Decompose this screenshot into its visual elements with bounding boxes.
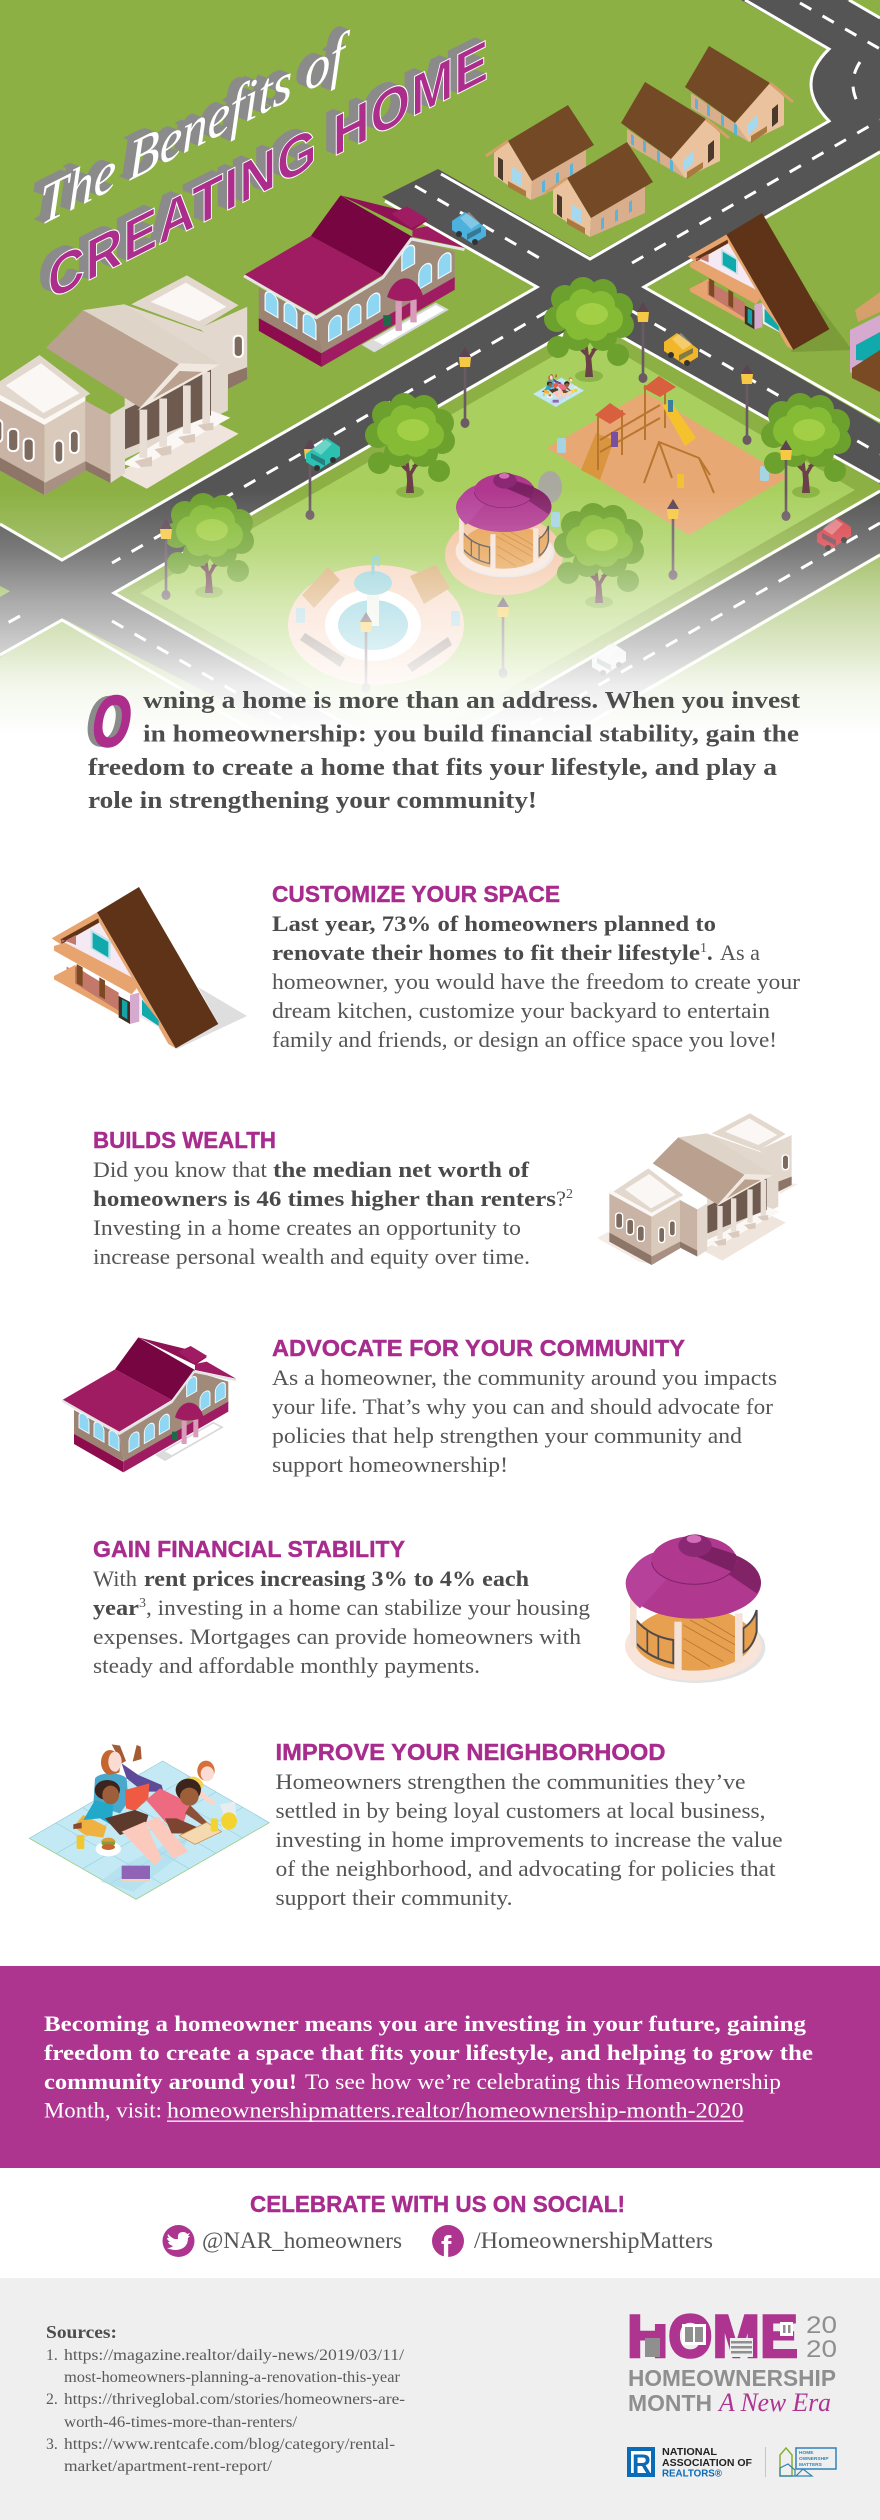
fountain plaza xyxy=(288,557,464,685)
heading: social: CELEBRATE WITH US ON SOCIAL! xyxy=(250,2191,625,2217)
trash bins xyxy=(296,438,769,626)
text: builds wealth: Investing in a home creates an opportunity to xyxy=(93,1215,521,1240)
text: neighborhood: Homeowners strengthen the communities they’ve xyxy=(276,1769,746,1794)
icon: bank building xyxy=(597,1113,798,1265)
hero illustration: isometric neighborhood xyxy=(0,0,880,825)
title line: the benefits of: The Benefits of xyxy=(40,22,344,239)
text: neighborhood: of the neighborhood, and advocating for policies that xyxy=(276,1856,776,1881)
intro paragraph with drop cap: freedom to create a home that fits your lifestyle, and play a xyxy=(88,754,777,781)
road network xyxy=(0,0,880,801)
text: neighborhood xyxy=(276,1769,783,1910)
facebook handle: /HomeownershipMatters xyxy=(474,2228,713,2253)
text: advocate: As a homeowner, the community around you impacts xyxy=(272,1365,777,1390)
trees xyxy=(164,277,851,608)
sources list: market/apartment-rent-report/ xyxy=(64,2458,273,2475)
text: builds wealth: ? xyxy=(556,1186,566,1211)
home 2020 logo: 20 xyxy=(806,2312,837,2339)
text: builds wealth: the median net worth of xyxy=(273,1157,530,1182)
white cover below hero xyxy=(0,735,880,825)
home 2020 logo: HOME xyxy=(627,2303,798,2370)
sources list: https://www.rentcafe.com/blog/category/rental- xyxy=(64,2436,395,2453)
road edge lines xyxy=(0,0,880,775)
icon: a-frame house xyxy=(52,887,247,1049)
gazebo xyxy=(445,471,563,595)
heading: financial stability: GAIN FINANCIAL STABILITY xyxy=(93,1536,405,1562)
purple call-to-action band: Becoming a homeowner means you are investing in your future, gaining xyxy=(44,2011,807,2036)
text: builds wealth xyxy=(93,1157,573,1269)
text: advocate: support homeownership! xyxy=(272,1452,508,1477)
lawn background xyxy=(0,0,880,740)
text: customize your space xyxy=(272,911,801,1052)
home 2020 logo: MONTH xyxy=(628,2390,712,2416)
park lawn xyxy=(140,335,855,745)
purple call-to-action band: community around you! xyxy=(44,2069,297,2094)
national association of realtors logo: R xyxy=(632,2449,651,2479)
text: builds wealth: increase personal wealth and equity over time. xyxy=(93,1244,530,1269)
sources list xyxy=(46,2322,405,2475)
text: financial stability: With xyxy=(93,1566,137,1591)
text: financial stability: year xyxy=(93,1595,139,1620)
playground xyxy=(547,376,788,535)
section: improve your neighborhood xyxy=(29,1739,783,1910)
text: financial stability: expenses. Mortgages can provide homeowners with xyxy=(93,1624,581,1649)
homeownership matters logo xyxy=(765,2447,836,2477)
heading: advocate: ADVOCATE FOR YOUR COMMUNITY xyxy=(272,1335,685,1361)
text: financial stability xyxy=(93,1566,590,1678)
section: gain financial stability xyxy=(93,1534,765,1683)
social section xyxy=(162,2191,713,2264)
icon: gazebo xyxy=(625,1534,765,1683)
text: customize your space: As a xyxy=(720,940,760,965)
purple call-to-action band: homeownershipmatters.realtor/homeownership-month-2020 xyxy=(167,2098,744,2122)
text: customize your space: homeowner, you would have the freedom to create your xyxy=(272,969,801,994)
text: customize your space: . xyxy=(707,940,713,965)
text: advocate: your life. That’s why you can and should advocate for xyxy=(272,1394,774,1419)
heading: builds wealth: BUILDS WEALTH xyxy=(93,1127,276,1153)
intro paragraph with drop cap: role in strengthening your community! xyxy=(88,787,537,814)
national association of realtors logo: NATIONAL xyxy=(662,2446,718,2458)
sources list: https://magazine.realtor/daily-news/2019/03/11/ xyxy=(64,2347,405,2364)
homeownership matters logo: OWNERSHIP xyxy=(799,2456,829,2462)
home 2020 logo xyxy=(627,2303,837,2417)
purple house xyxy=(244,195,465,367)
text: customize your space: family and friends, or design an office space you love! xyxy=(272,1027,777,1052)
text: builds wealth: homeowners is 46 times higher than renters xyxy=(93,1186,556,1211)
icon: facebook: f xyxy=(441,2229,452,2264)
text: customize your space: renovate their homes to fit their lifestyle xyxy=(272,940,700,965)
white fade at bottom of hero xyxy=(0,490,880,735)
home 2020 logo: 20 xyxy=(806,2336,837,2363)
sources list: 1. xyxy=(46,2347,58,2364)
icon: family picnic xyxy=(29,1744,269,1899)
title line: creating home: CREATING HOME xyxy=(48,27,489,314)
text: neighborhood: settled in by being loyal customers at local business, xyxy=(276,1798,766,1823)
home 2020 logo: A New Era xyxy=(717,2388,831,2417)
twitter handle: @NAR_homeowners xyxy=(202,2228,402,2253)
text: financial stability: , investing in a home can stabilize your housing xyxy=(146,1595,590,1620)
sources list: worth-46-times-more-than-renters/ xyxy=(64,2414,298,2431)
icon: facebook xyxy=(432,2225,464,2264)
purple call-to-action band: To see how we’re celebrating this Homeownership xyxy=(305,2069,781,2094)
section: builds wealth xyxy=(93,1113,798,1269)
a-frame house xyxy=(688,213,852,352)
text: neighborhood: support their community. xyxy=(276,1885,512,1910)
picnic blanket xyxy=(533,374,584,407)
text: financial stability: 3 xyxy=(139,1596,146,1611)
cottages xyxy=(486,46,793,237)
homeownership matters logo: MATTERS xyxy=(799,2462,823,2468)
purple call-to-action band xyxy=(0,1966,880,2168)
intro paragraph with drop cap: wning a home is more than an address. When you invest xyxy=(143,687,801,714)
bank building xyxy=(0,275,247,495)
home 2020 logo: HOMEOWNERSHIP xyxy=(628,2365,836,2391)
icon: twitter xyxy=(162,2225,194,2257)
section: customize your space xyxy=(52,881,801,1052)
sources list: https://thriveglobal.com/stories/homeowners-are- xyxy=(64,2391,405,2408)
cars xyxy=(306,212,851,676)
national association of realtors logo: REALTORS® xyxy=(662,2468,722,2480)
national association of realtors logo xyxy=(627,2446,753,2480)
drop cap O: O xyxy=(86,682,138,762)
footer panel xyxy=(0,2278,880,2520)
text: builds wealth: 2 xyxy=(566,1187,573,1202)
sources list: 3. xyxy=(46,2436,58,2453)
sources list: Sources: xyxy=(46,2322,117,2342)
text: customize your space: dream kitchen, customize your backyard to entertain xyxy=(272,998,770,1023)
heading: neighborhood: IMPROVE YOUR NEIGHBORHOOD xyxy=(276,1739,666,1765)
text: advocate xyxy=(272,1365,777,1477)
text: customize your space: 1 xyxy=(700,941,707,956)
text: advocate: policies that help strengthen your community and xyxy=(272,1423,742,1448)
purple call-to-action band: freedom to create a space that fits your lifestyle, and helping to grow the xyxy=(44,2040,813,2065)
homeownership matters logo: HOME xyxy=(799,2450,814,2456)
heading: customize your space: CUSTOMIZE YOUR SPACE xyxy=(272,881,560,907)
intro paragraph with drop cap xyxy=(88,687,801,814)
text: builds wealth: Did you know that xyxy=(93,1157,268,1182)
text: neighborhood: investing in home improvements to increase the value xyxy=(276,1827,783,1852)
road centre dashes xyxy=(0,3,880,787)
purple call-to-action band: Month, visit: xyxy=(44,2098,162,2122)
street lamps xyxy=(160,302,792,693)
section: advocate for your community xyxy=(62,1335,777,1477)
icon: purple house xyxy=(62,1337,236,1472)
partial house at right edge xyxy=(850,292,880,392)
text: financial stability: steady and affordable monthly payments. xyxy=(93,1653,480,1678)
text: customize your space: Last year, 73% of homeowners planned to xyxy=(272,911,716,936)
national association of realtors logo: ASSOCIATION OF xyxy=(662,2457,753,2469)
sources list: most-homeowners-planning-a-renovation-this-year xyxy=(64,2369,401,2386)
text: financial stability: rent prices increasing 3% to 4% each xyxy=(144,1566,530,1591)
sources list: 2. xyxy=(46,2391,58,2408)
intro paragraph with drop cap: in homeownership: you build financial stability, gain the xyxy=(143,720,799,748)
